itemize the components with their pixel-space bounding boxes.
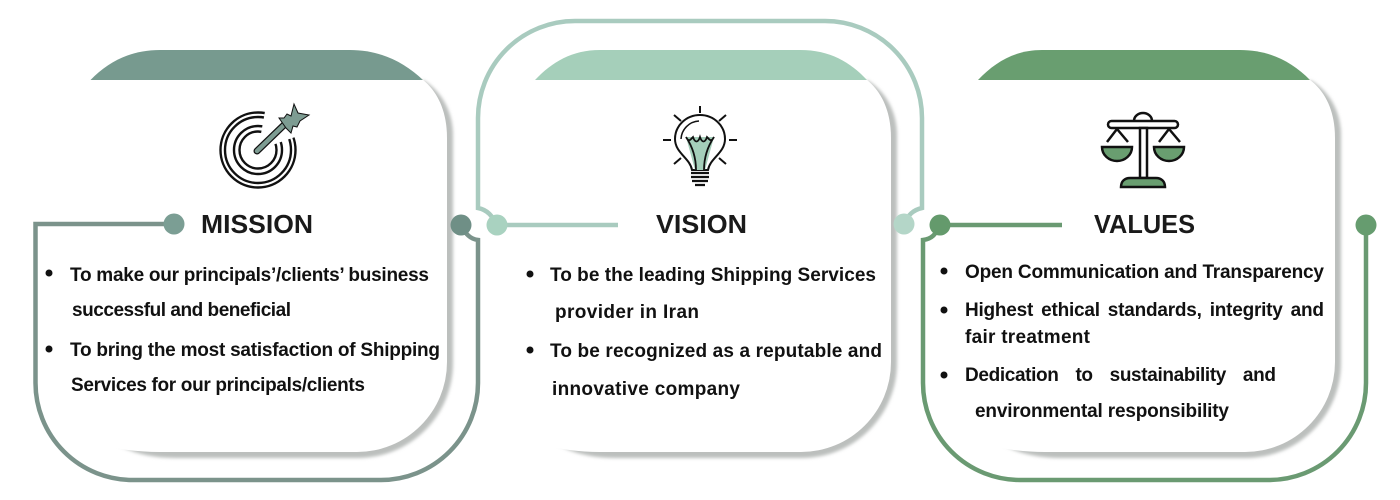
vision connector dot left xyxy=(486,214,508,236)
vision header tab xyxy=(535,50,867,80)
vision bullet list: provider in Iran xyxy=(555,302,699,323)
vision bullet list xyxy=(526,265,882,400)
values bullet list: Highest ethical standards, integrity and xyxy=(965,300,1324,321)
mission header tab xyxy=(90,50,423,80)
mission card shadow xyxy=(100,80,453,458)
mission bullet list: To make our principals’/clients’ business xyxy=(70,265,429,286)
values bullet list xyxy=(940,262,1324,422)
values heading: VALUES xyxy=(1094,209,1195,239)
values header tab xyxy=(978,50,1310,80)
values connector dot right xyxy=(1356,214,1376,236)
vision connector outline xyxy=(478,21,922,225)
icon: target with arrow xyxy=(220,104,310,188)
values card xyxy=(930,80,1335,452)
mission heading: MISSION xyxy=(201,209,313,239)
mission bullet list: Services for our principals/clients xyxy=(71,375,365,396)
mission connector outline xyxy=(36,224,478,480)
vision bullet list: innovative company xyxy=(552,379,740,400)
values bullet list: environmental responsibility xyxy=(975,401,1229,422)
vision card shadow xyxy=(540,80,897,458)
mission connector dot left xyxy=(164,214,184,234)
values bullet list: Open Communication and Transparency xyxy=(965,262,1324,283)
values bullet list: Dedication to sustainability and xyxy=(965,365,1276,386)
vision card xyxy=(486,80,891,452)
vision connector dot right xyxy=(894,214,914,234)
mission card xyxy=(42,80,447,452)
mission connector dot right xyxy=(450,214,472,236)
panel: values xyxy=(923,50,1376,480)
panel: vision xyxy=(478,21,922,458)
icon: light bulb xyxy=(663,106,737,185)
icon: balance scale xyxy=(1102,113,1184,187)
mission bullet list: successful and beneficial xyxy=(72,300,291,321)
mission bullet list: To bring the most satisfaction of Shipping xyxy=(70,340,440,361)
vision bullet list: To be the leading Shipping Services xyxy=(550,265,876,286)
vision bullet list: To be recognized as a reputable and xyxy=(550,341,882,362)
values connector outline xyxy=(923,225,1366,480)
mission bullet list xyxy=(46,265,440,396)
values bullet list: fair treatment xyxy=(965,327,1091,348)
panel: mission xyxy=(36,50,478,480)
vision heading: VISION xyxy=(656,209,747,239)
values card shadow xyxy=(985,80,1341,458)
values connector dot left xyxy=(930,214,950,236)
